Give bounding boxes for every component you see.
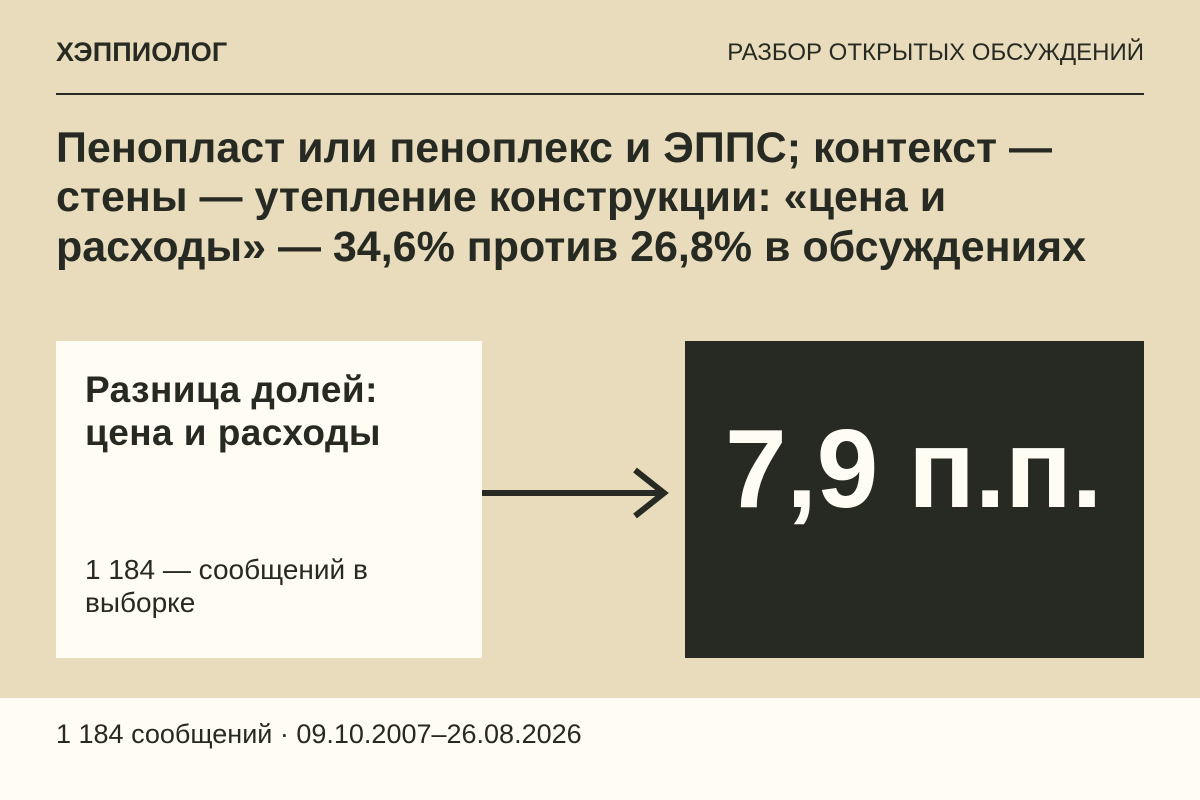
title: Пенопласт или пеноплекс и ЭППС; контекст — [56, 124, 1052, 172]
panel heading [85, 369, 381, 453]
arrow [482, 468, 669, 518]
panel heading: цена и расходы [85, 412, 381, 453]
big number: 7,9 п.п. [725, 407, 1102, 531]
sample note: выборке [85, 587, 195, 618]
panel: metric description [56, 341, 482, 658]
sample note [85, 554, 368, 618]
panel: result value [685, 341, 1144, 658]
title [56, 124, 1086, 270]
section label: РАЗБОР ОТКРЫТЫХ ОБСУЖДЕНИЙ [727, 39, 1144, 66]
footer band [0, 698, 1200, 800]
footer text: 1 184 сообщений · 09.10.2007–26.08.2026 [56, 719, 582, 749]
sample note: 1 184 — сообщений в [85, 554, 368, 585]
title: расходы» — 34,6% против 26,8% в обсуждениях [56, 222, 1086, 270]
panel heading: Разница долей: [85, 369, 378, 410]
brand name: ХЭППИОЛОГ [56, 37, 227, 67]
title: стены — утепление конструкции: «цена и [56, 173, 946, 221]
